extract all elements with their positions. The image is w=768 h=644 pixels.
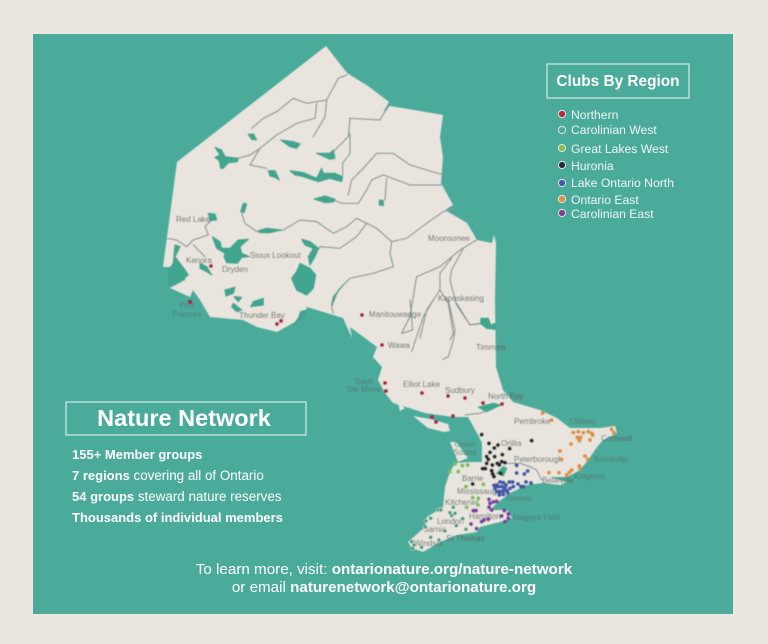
dots: Great Lakes West [448, 462, 485, 509]
footer: contact text: or email naturenetwork@ontarionature.org [232, 579, 536, 596]
lakes [168, 134, 496, 329]
dots: Lake Ontario North [492, 463, 533, 497]
map: Ontario [163, 46, 632, 552]
city labels: London [437, 517, 464, 526]
legend entries: Huronia [571, 159, 614, 173]
land outline [163, 46, 617, 552]
city labels: Manitouwadge [369, 310, 422, 319]
footer: contact text [196, 561, 573, 596]
Manitoulin and Bruce islands [398, 403, 468, 462]
legend title box: Clubs By Region [556, 73, 680, 90]
city labels: Toronto [505, 494, 532, 503]
dots: Carolinian East [469, 497, 510, 531]
legend entries: Carolinian West [571, 123, 657, 137]
city labels: Pembroke [514, 417, 551, 426]
rivers [167, 75, 483, 340]
callout stats [72, 447, 283, 525]
callout heading [66, 402, 306, 435]
dots: Huronia [471, 433, 534, 486]
city labels: Ottawa [570, 417, 596, 426]
city labels: Kingston [574, 472, 605, 481]
legend entries: Lake Ontario North [571, 176, 674, 190]
legend entries: Ontario East [571, 193, 639, 207]
city labels: Timmins [476, 343, 506, 352]
callout stats: 7 regions covering all of Ontario [72, 468, 264, 483]
city labels: Port [180, 301, 195, 310]
city labels: Kenora [186, 256, 212, 265]
city labels: Elliot Lake [403, 380, 440, 389]
city labels: Windsor [414, 539, 444, 548]
dots: Carolinian West [410, 505, 468, 550]
callout stats: 155+ Member groups [72, 447, 202, 462]
city labels: Peterborough [514, 455, 562, 464]
city labels: Wawa [388, 341, 410, 350]
city labels: Barrie [462, 474, 484, 483]
city labels: Niagara Falls [513, 513, 560, 522]
city labels: Hamilton [469, 512, 501, 521]
city labels: Kapuskasing [438, 294, 484, 303]
city labels: St Thomas [446, 534, 485, 543]
legend: Clubs By Region [547, 64, 689, 221]
legend entries [558, 108, 674, 221]
city labels: Owen [455, 440, 475, 449]
city labels: Moonsonee [428, 234, 470, 243]
city labels: Belleville [542, 476, 574, 485]
city labels: Sudbury [445, 386, 475, 395]
city labels: North Bay [488, 392, 524, 401]
callout: Nature Network [66, 402, 306, 525]
city labels: Brockville [594, 455, 629, 464]
city labels: Cornwall [601, 434, 632, 443]
callout stats: 54 groups steward nature reserves [72, 489, 282, 504]
city labels: Red Lake [176, 215, 211, 224]
city labels: Ste Marie [347, 385, 382, 394]
city labels: Mississauga [457, 487, 502, 496]
legend entries: Great Lakes West [571, 142, 669, 156]
city labels: Thunder Bay [239, 311, 285, 320]
city labels: Sioux Lookout [250, 251, 301, 260]
legend entries: Northern [571, 108, 618, 122]
city labels: Kitchener [445, 498, 479, 507]
city labels: Frances [173, 310, 201, 319]
city labels: Sound [453, 448, 477, 457]
city labels: Orillia [501, 439, 522, 448]
callout heading: Nature Network [97, 405, 272, 431]
city labels: Sault [355, 377, 374, 386]
legend entries: Carolinian East [571, 207, 654, 221]
callout stats: Thousands of individual members [72, 510, 283, 525]
city labels: Dryden [222, 265, 248, 274]
dots: Ontario East [541, 411, 616, 477]
footer: contact text: To learn more, visit: ontarionature.org/nature-network [196, 561, 573, 578]
city labels [173, 215, 632, 548]
city labels: Sarnia [423, 525, 447, 534]
dots: Northern [188, 264, 504, 424]
legend title box [547, 64, 689, 98]
